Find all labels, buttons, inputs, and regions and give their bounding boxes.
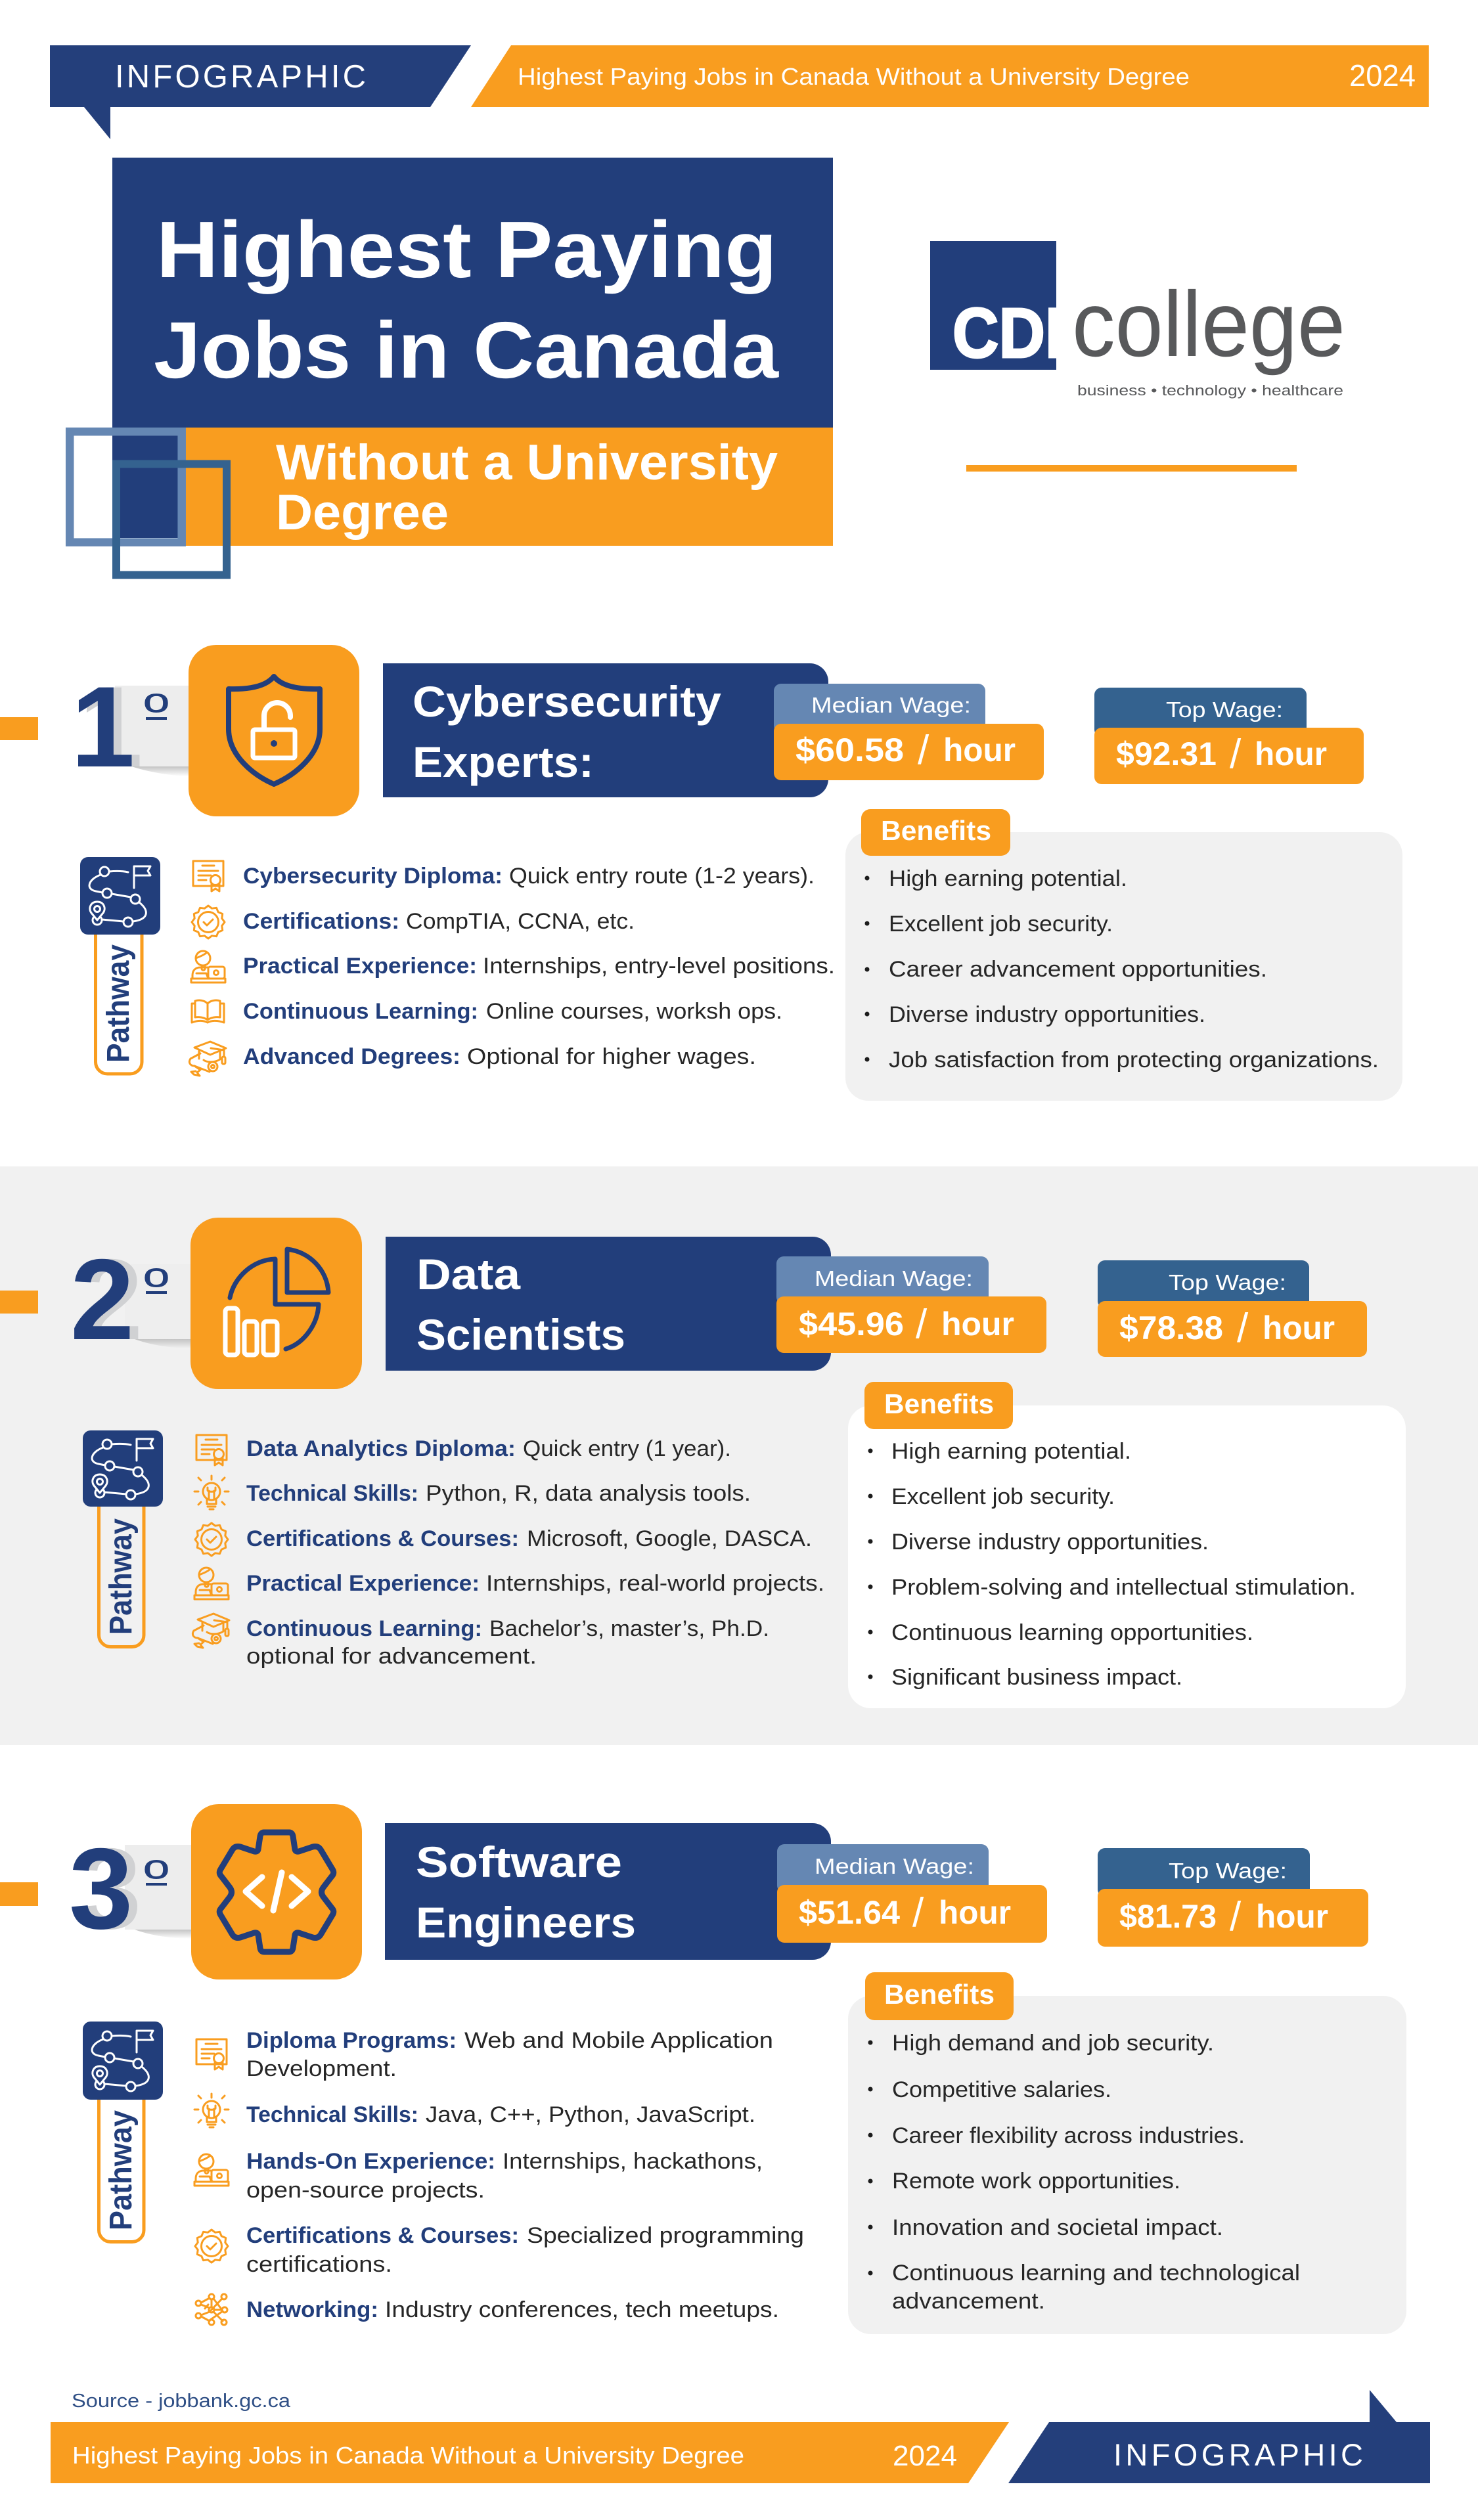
job title bar xyxy=(386,1237,831,1371)
step: hands-on experience xyxy=(246,2149,763,2203)
pathway tag xyxy=(80,857,160,1074)
footer banner: subject and year: 2024 xyxy=(893,2440,957,2472)
median wage card xyxy=(774,684,1044,780)
title block xyxy=(70,158,833,575)
step: certifications and courses xyxy=(246,2223,804,2277)
step: continuous learning: Continuous Learning: xyxy=(243,999,478,1024)
benefits panel: Diverse industry opportunities. xyxy=(889,1002,1205,1027)
step: diploma: Quick entry route (1-2 years). xyxy=(509,864,815,889)
top wage card: hour xyxy=(1256,1898,1328,1935)
rank number 1: 1 xyxy=(79,663,143,791)
rank number 2: 2 xyxy=(79,1236,143,1364)
step: technical skills xyxy=(246,2102,755,2127)
rank number 1: 1 xyxy=(71,663,135,791)
rank number 2: 2 xyxy=(70,1236,134,1364)
footer banner: infographic flag xyxy=(1008,2390,1430,2483)
step: certifications and courses xyxy=(246,1526,812,1551)
step: certifications: CompTIA, CCNA, etc. xyxy=(406,909,635,934)
icon: person at laptop xyxy=(194,2154,229,2186)
source line: Source - jobbank.gc.ca xyxy=(72,2391,291,2412)
icon: diploma xyxy=(196,1435,227,1465)
pathway tag xyxy=(83,1430,163,1647)
step: practical experience xyxy=(243,954,835,979)
icon: person at laptop xyxy=(191,951,225,983)
title block: Degree xyxy=(276,485,449,541)
step: diploma xyxy=(246,1436,731,1461)
icon: diploma xyxy=(193,861,223,891)
icon: light bulb xyxy=(194,1476,229,1509)
step: continuous learning xyxy=(246,1616,769,1669)
pathway tag: Pathway xyxy=(104,1518,139,1635)
icon: badge xyxy=(195,2230,228,2263)
job title bar xyxy=(385,1823,831,1960)
job title bar: Scientists xyxy=(416,1310,625,1359)
logo: CDI college xyxy=(930,241,1345,399)
step: diploma: Data Analytics Diploma: xyxy=(246,1436,516,1461)
median wage card: / xyxy=(912,1890,924,1935)
median wage card: hour xyxy=(941,1306,1014,1342)
step: certifications and courses: Certifications & Courses: xyxy=(246,1526,519,1551)
median wage card: / xyxy=(916,1302,928,1347)
section 1: cybersecurity experts xyxy=(0,645,1402,1101)
step: technical skills xyxy=(246,1481,751,1506)
step: certifications and courses: certifications. xyxy=(246,2252,392,2277)
top wage card: hour xyxy=(1263,1310,1335,1346)
median wage card: Median Wage: xyxy=(811,693,971,717)
step: certifications and courses: Microsoft, Google, DASCA. xyxy=(527,1526,812,1551)
pathway tag xyxy=(83,2022,163,2242)
top wage card: hour xyxy=(1255,736,1327,772)
pathway tag: Pathway xyxy=(101,944,136,1063)
median wage card: / xyxy=(918,728,929,773)
median wage card xyxy=(776,1256,1046,1353)
step: diploma programs: Web and Mobile Application xyxy=(464,2028,773,2053)
logo: CDI college: business • technology • healthcare xyxy=(1077,382,1343,399)
benefits panel: High earning potential. xyxy=(889,866,1127,891)
step: certifications and courses: Certifications & Courses: xyxy=(246,2223,519,2248)
icon: diploma xyxy=(196,2039,227,2069)
top wage card: / xyxy=(1230,1894,1242,1939)
icon: graduation xyxy=(189,1042,226,1076)
step: diploma xyxy=(243,864,815,889)
median wage card: $45.96 xyxy=(799,1306,904,1342)
benefits panel: Career flexibility across industries. xyxy=(892,2123,1245,2148)
job title bar: Software xyxy=(416,1838,622,1886)
step: practical experience: Practical Experience: xyxy=(243,954,477,979)
pathway tag: Pathway xyxy=(104,2110,139,2230)
side marker xyxy=(0,1882,38,1906)
benefits panel: High earning potential. xyxy=(891,1439,1131,1464)
icon: badge xyxy=(192,906,225,939)
pathway list xyxy=(194,2028,804,2325)
median wage card: hour xyxy=(943,732,1016,768)
step: networking: Industry conferences, tech meetups. xyxy=(385,2297,779,2322)
benefits panel: Diverse industry opportunities. xyxy=(891,1530,1209,1555)
median wage card: Median Wage: xyxy=(815,1854,974,1878)
logo underline xyxy=(966,465,1297,472)
median wage card: hour xyxy=(939,1894,1011,1931)
logo: CDI college: college xyxy=(1072,272,1345,376)
step: networking: Networking: xyxy=(246,2297,378,2322)
step: advanced degrees: Advanced Degrees: xyxy=(243,1044,460,1069)
step: technical skills: Technical Skills: xyxy=(246,2102,418,2127)
rank number 3: º xyxy=(144,1850,169,1906)
rank number 2: º xyxy=(144,1258,169,1314)
icon: light bulb xyxy=(194,2094,229,2127)
top wage card xyxy=(1098,1260,1367,1357)
step: continuous learning: Online courses, worksh ops. xyxy=(486,999,782,1024)
step: continuous learning: optional for advancement. xyxy=(246,1644,537,1669)
benefits panel: Competitive salaries. xyxy=(892,2077,1111,2102)
step: hands-on experience: Internships, hackathons, xyxy=(503,2149,763,2174)
job title bar: Cybersecurity xyxy=(413,677,721,726)
benefits panel: Significant business impact. xyxy=(891,1665,1182,1690)
benefits panel: Continuous learning and technological xyxy=(892,2261,1300,2286)
median wage card: $60.58 xyxy=(795,732,904,768)
rank number 3: 3 xyxy=(78,1825,141,1953)
section 2 background band xyxy=(0,1166,1478,1745)
rank number 3 xyxy=(69,1825,192,1953)
benefits panel: Career advancement opportunities. xyxy=(889,957,1267,982)
benefits panel: Job satisfaction from protecting organizations. xyxy=(889,1048,1379,1072)
rank number 3: 3 xyxy=(69,1825,133,1953)
title block: Jobs in Canada xyxy=(154,305,779,395)
top wage card: Top Wage: xyxy=(1166,697,1283,722)
step: practical experience: Practical Experience: xyxy=(246,1571,480,1596)
benefits panel: Excellent job security. xyxy=(889,912,1113,937)
top banner: infographic flag xyxy=(50,45,471,139)
rank number 2 xyxy=(70,1236,191,1364)
step: continuous learning: Bachelor’s, master’s, Ph.D. xyxy=(489,1616,769,1641)
section 3: software engineers xyxy=(0,1804,1406,2334)
title block: Without a University xyxy=(276,435,778,491)
step: networking xyxy=(246,2297,779,2322)
footer banner: subject and year: Highest Paying Jobs in Canada Without a University Degree xyxy=(72,2442,744,2469)
side marker xyxy=(0,1291,38,1314)
step: technical skills: Java, C++, Python, JavaScript. xyxy=(426,2102,755,2127)
benefits panel: Benefits xyxy=(884,1388,994,1419)
footer banner: subject and year xyxy=(51,2422,1009,2483)
step: hands-on experience: Hands-On Experience: xyxy=(246,2149,495,2174)
benefits panel: advancement. xyxy=(892,2289,1045,2314)
step: diploma programs: Diploma Programs: xyxy=(246,2028,457,2053)
step: continuous learning xyxy=(243,999,782,1024)
benefits panel: Excellent job security. xyxy=(891,1484,1115,1509)
step: technical skills: Python, R, data analysis tools. xyxy=(426,1481,751,1506)
step: hands-on experience: open-source projects. xyxy=(246,2178,485,2203)
step: diploma: Cybersecurity Diploma: xyxy=(243,864,503,889)
job title bar xyxy=(383,663,828,797)
icon: code gear xyxy=(191,1804,362,1979)
pathway list xyxy=(192,1435,824,1669)
logo: CDI college: CDI xyxy=(952,293,1063,372)
top wage card xyxy=(1094,688,1364,784)
median wage card: Median Wage: xyxy=(815,1266,973,1291)
icon: network xyxy=(196,2294,227,2325)
top wage card: / xyxy=(1237,1306,1249,1351)
top wage card: $81.73 xyxy=(1119,1898,1217,1935)
top banner: subject and year xyxy=(471,45,1429,107)
benefits panel: Remote work opportunities. xyxy=(892,2169,1180,2194)
median wage card: $51.64 xyxy=(799,1894,900,1931)
pathway list xyxy=(189,861,835,1076)
top wage card: / xyxy=(1230,732,1242,777)
step: technical skills: Technical Skills: xyxy=(246,1481,418,1506)
step: certifications and courses: Specialized programming xyxy=(527,2223,804,2248)
icon: book xyxy=(192,1000,224,1023)
median wage card xyxy=(777,1844,1047,1943)
top wage card xyxy=(1098,1848,1368,1947)
step: diploma programs: Development. xyxy=(246,2056,397,2081)
top banner: subject and year: 2024 xyxy=(1349,58,1416,93)
top wage card: Top Wage: xyxy=(1169,1270,1286,1294)
icon: graduation xyxy=(192,1614,229,1648)
benefits panel: Innovation and societal impact. xyxy=(892,2215,1223,2240)
top wage card: $92.31 xyxy=(1116,736,1217,772)
section 2: data scientists xyxy=(0,1218,1406,1708)
benefits panel: High demand and job security. xyxy=(892,2031,1214,2056)
icon: pie chart and bars xyxy=(190,1218,362,1389)
benefits panel xyxy=(848,1972,1406,2334)
step: practical experience: Internships, real-world projects. xyxy=(486,1571,824,1596)
step: advanced degrees: Optional for higher wages. xyxy=(467,1044,756,1069)
step: practical experience: Internships, entry-level positions. xyxy=(483,954,835,979)
step: practical experience xyxy=(246,1571,824,1596)
title block: Highest Paying xyxy=(156,205,777,294)
benefits panel: Problem-solving and intellectual stimulation. xyxy=(891,1575,1356,1600)
icon: shield with open lock xyxy=(189,645,359,816)
step: certifications xyxy=(243,909,635,934)
benefits panel xyxy=(848,1382,1406,1708)
top banner: subject and year: Highest Paying Jobs in Canada Without a University Degree xyxy=(518,63,1190,90)
benefits panel: Benefits xyxy=(881,815,991,846)
benefits panel: Benefits xyxy=(884,1979,995,2010)
side marker xyxy=(0,717,38,740)
rank number 1: º xyxy=(144,684,169,740)
job title bar: Engineers xyxy=(416,1898,636,1947)
job title bar: Data xyxy=(416,1250,521,1298)
step: diploma programs xyxy=(246,2028,773,2081)
icon: badge xyxy=(195,1523,228,1556)
step: diploma: Quick entry (1 year). xyxy=(523,1436,731,1461)
job title bar: Experts: xyxy=(413,738,594,786)
icon: person at laptop xyxy=(194,1568,229,1599)
top banner: infographic flag: INFOGRAPHIC xyxy=(115,59,366,95)
top wage card: $78.38 xyxy=(1119,1310,1223,1346)
benefits panel xyxy=(845,809,1402,1101)
benefits panel: Continuous learning opportunities. xyxy=(891,1620,1253,1645)
step: certifications: Certifications: xyxy=(243,909,399,934)
step: continuous learning: Continuous Learning: xyxy=(246,1616,482,1641)
step: advanced degrees xyxy=(243,1044,756,1069)
rank number 1 xyxy=(71,663,190,791)
top wage card: Top Wage: xyxy=(1169,1859,1287,1883)
footer banner: infographic flag: INFOGRAPHIC xyxy=(1113,2437,1363,2472)
